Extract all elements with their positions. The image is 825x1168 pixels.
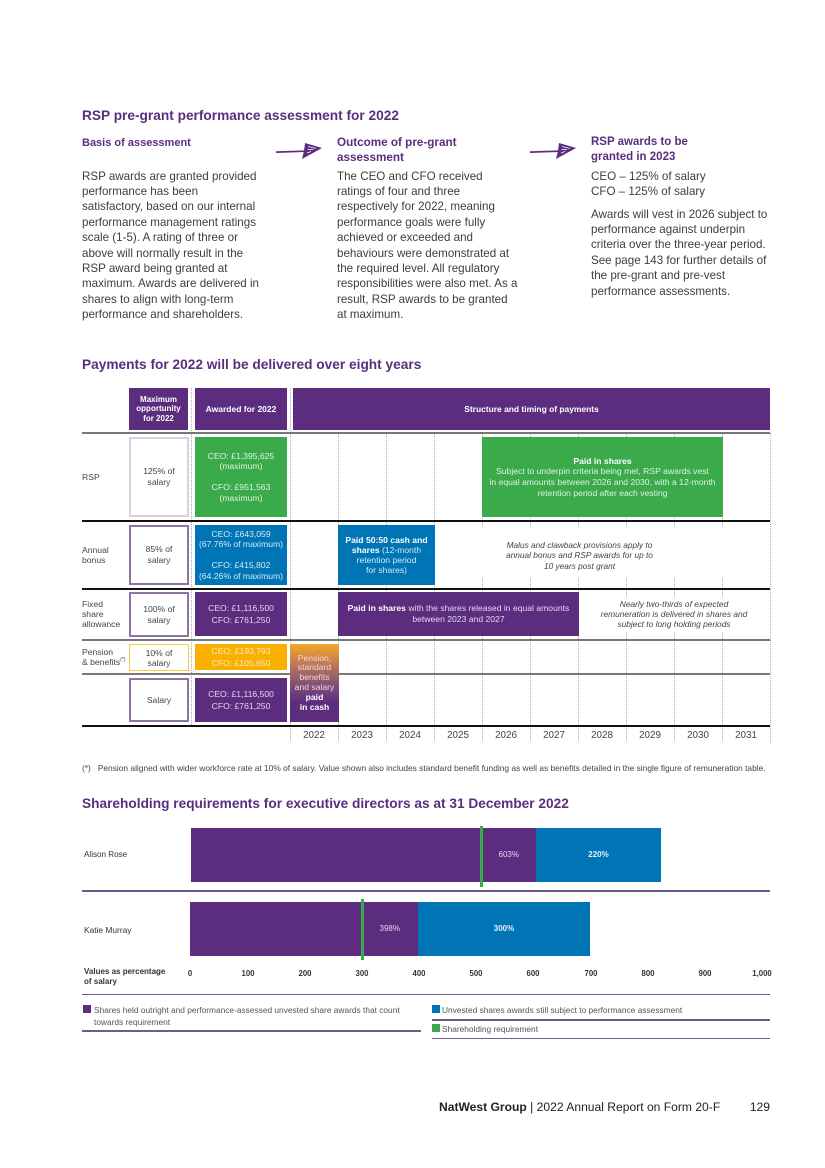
timing: fixed share allowance [338,592,579,636]
header: structure and timing: Structure and timing of payments [464,404,599,414]
heading: payments: Payments for 2022 will be delivered over eight years [82,357,421,372]
footer: 129 [750,1100,770,1114]
award: annual bonus [195,525,287,585]
subheading: awards: granted in 2023 [591,151,675,163]
text: vesting details: the pre-grant and pre-vest [591,269,725,282]
footnote: (*) Pension aligned with wider workforce rate at 10% of salary. Value shown also includes standard benefit funding as well as benefits detailed in the single figure of remuneration table. [82,763,766,773]
text: basis body: above will normally result in the [82,247,243,260]
bar: Alison Rose unvested [536,828,661,882]
timing: RSP paid in shares [482,437,723,517]
bar: Alison Rose unvested: 220% [588,850,609,859]
header: maximum opportunity: for 2022 [143,414,174,423]
label: annual bonus [82,545,109,565]
axis: values as percentage of salary: 1,000 [752,969,772,978]
axis: values as percentage of salary: 800 [641,969,654,978]
axis: years: 2025 [447,730,469,741]
award: RSP [195,437,287,517]
axis: years: 2024 [399,730,421,741]
header: maximum opportunity: opportunity [136,404,181,413]
text: vesting details: See page 143 for further details of [591,254,766,267]
label: annual bonus: bonus [82,555,105,565]
timing: pension and salary paid in cash: and salary [295,682,334,692]
opportunity: pension: 10% of [146,648,172,658]
text: outcome body: the required level. All regulatory [337,262,499,275]
axis: years: 2028 [591,730,613,741]
note: malus and clawback: annual bonus and RSP awards for up to [506,550,653,560]
text: basis body: performance has been [82,185,198,198]
axis: values as percentage of salary: 0 [188,969,192,978]
text: outcome body: at maximum. [337,308,403,321]
legend: Unvested shares awards still subject to performance assessment [442,1004,682,1014]
award: pension [195,644,287,670]
text: award levels: CFO – 125% of salary [591,185,705,198]
timing: pension and salary paid in cash: standard [298,662,331,672]
timing: annual bonus paid 50:50: Paid 50:50 cash and [345,535,428,545]
opportunity: RSP: 125% of [143,466,175,476]
axis: years: 2022 [303,730,325,741]
award: salary [195,678,287,722]
note: malus and clawback: Malus and clawback provisions apply to [507,540,652,550]
text: basis body: performance and shareholders. [82,308,243,321]
text: basis body: scale (1-5). A rating of three or [82,231,238,244]
timing: pension and salary paid in cash: in cash [300,702,329,712]
bar: Alison Rose shares: 603% [499,850,519,859]
axis: values as percentage of salary: 200 [298,969,312,978]
opportunity: fixed share allowance: 100% of [143,604,175,614]
icon: arrow 2 [530,143,576,159]
award: salary: CEO: £1,116,500 [208,689,274,699]
axis: values as percentage of salary: 900 [698,969,712,978]
text: outcome body: behaviours were demonstrated at [337,247,509,260]
axis: values as percentage of salary: Values as percentage [84,967,165,976]
heading: shareholding: Shareholding requirements for executive directors as at 31 December 2022 [82,796,569,811]
footer: NatWest Group | 2022 Annual Report on Form 20-F [439,1100,720,1114]
award: RSP: (maximum) [220,461,262,471]
subheading: outcome: assessment [337,151,404,164]
bar: Alison Rose shares [191,828,536,882]
axis: values as percentage of salary: 500 [469,969,482,978]
timing: pension and salary paid in cash [290,644,339,722]
axis: years: 2026 [495,730,517,741]
opportunity: pension: salary [148,658,170,668]
note: two-thirds: subject to long holding periods [617,619,731,629]
panel: RSP awards to be granted [591,136,767,298]
text: outcome body: ratings of four and three [337,185,460,198]
bar: Katie Murray shares: 398% [380,924,400,933]
award: annual bonus: (67.76% of maximum) [199,539,283,549]
subheading: awards: RSP awards to be [591,136,688,148]
note: two-thirds: remuneration is delivered in shares and [601,609,747,619]
timing: RSP paid in shares: retention period after each vesting [538,488,667,498]
text: outcome body: achieved or exceeded and [337,231,473,244]
legend item: requirement [432,1024,440,1032]
award: pension: CFO: £105,650 [212,658,270,668]
panel: outcome of assessment [337,136,518,321]
marker: Katie Murray requirement [360,899,364,960]
heading: RSP pre-grant assessment: RSP pre-grant performance assessment for 2022 [82,108,399,123]
label: pension and benefits: Pension [82,647,113,657]
text: basis body: RSP awards are granted provided [82,170,256,182]
subheading: outcome: Outcome of pre-grant [337,136,456,149]
timing: pension and salary paid in cash: benefits [299,672,330,682]
opportunity: annual bonus: 85% of [146,544,172,554]
opportunity: pension [129,644,189,671]
legend: Shares held outright and performance-assessed unvested share awards that count [94,1004,400,1014]
timing: fixed share allowance: between 2023 and 2027 [412,614,505,624]
axis: values as percentage of salary: 300 [355,969,368,978]
text: vesting details: performance assessments. [591,285,730,298]
opportunity: fixed share allowance [129,592,189,637]
header: maximum opportunity: Maximum [140,395,177,404]
marker: Alison Rose requirement [480,826,483,887]
text: award levels [591,170,706,198]
award: salary: CFO: £761,250 [212,701,270,711]
text: basis body: shares to align with long-term [82,293,233,306]
opportunity: RSP: salary [148,477,170,487]
text: basis body: RSP award being granted at [82,262,227,275]
axis: values as percentage of salary [84,967,772,986]
bar: Katie Murray unvested: 300% [494,924,514,933]
axis: years: 2029 [639,730,661,741]
legend item: shares held [83,1005,91,1013]
subheading: basis: Basis of assessment [82,137,191,149]
opportunity: salary [129,678,189,722]
note: malus and clawback [481,528,724,578]
opportunity: annual bonus [129,525,189,585]
header: awarded: Awarded for 2022 [206,404,276,414]
text: award levels: CEO – 125% of salary [591,170,706,182]
opportunity: annual bonus: salary [148,555,170,565]
award: RSP: CFO: £951,563 [212,482,270,492]
award: annual bonus: CFO: £415,802 [212,560,270,570]
icon: arrow 1 [276,143,322,159]
note: two-thirds: Nearly two-thirds of expected [620,599,728,609]
legend: towards requirement [94,1016,170,1026]
timing: annual bonus paid 50:50: shares (12-month [352,545,421,555]
note: malus and clawback: 10 years post grant [544,561,615,571]
axis: years: 2030 [687,730,709,741]
label: fixed share allowance [82,599,120,629]
text: outcome body: The CEO and CFO received [337,170,483,182]
label: fixed share allowance: Fixed [82,599,103,609]
note: two-thirds [580,597,768,631]
text: outcome body: respectively for 2022, meaning [337,200,495,213]
timing: annual bonus paid 50:50: retention period [357,555,416,565]
label: annual bonus: Annual [82,545,109,555]
opportunity: RSP [129,437,189,517]
award: pension: CEO: £193,793 [211,646,271,656]
bar: Katie Murray shares [190,902,418,956]
label: fixed share allowance: share [82,609,104,619]
timing: pension and salary paid in cash: Pension, [298,653,331,663]
timing: RSP paid in shares: Paid in shares [573,456,632,466]
text: outcome body: result, RSP awards to be granted [337,293,508,306]
text: basis body: maximum. Awards are delivered in [82,277,259,290]
axis: values as percentage of salary: 400 [412,969,426,978]
bar: Katie Murray unvested [418,902,590,956]
axis: values as percentage of salary: 100 [241,969,254,978]
axis: values as percentage of salary: 700 [584,969,598,978]
panel: basis of assessment [82,137,259,321]
award: fixed share allowance: CEO: £1,116,500 [208,603,274,613]
legend [82,1004,770,1039]
award: fixed share allowance [195,592,287,636]
award: annual bonus: CEO: £643,059 [211,529,271,539]
text: basis body: satisfactory, based on our internal [82,200,255,213]
label: pension and benefits [82,647,126,667]
axis: years: 2027 [543,730,565,741]
axis: values as percentage of salary: of salary [84,977,117,986]
timing: RSP paid in shares: Subject to underpin criteria being met, RSP awards vest [496,466,709,476]
text: vesting details [591,208,767,298]
label: RSP: RSP [82,472,100,482]
legend item: unvested shares [432,1005,440,1013]
text: vesting details: Awards will vest in 2026 subject to [591,208,767,220]
timing: pension and salary paid in cash: paid [306,692,323,702]
opportunity: fixed share allowance: salary [148,614,170,624]
award: fixed share allowance: CFO: £761,250 [212,615,270,625]
axis: years: 2023 [351,730,373,741]
award: RSP: (maximum) [220,493,262,503]
header: maximum opportunity [129,388,188,430]
label: Katie Murray: Katie Murray [84,925,131,935]
text: outcome body [337,170,518,321]
label: Alison Rose: Alison Rose [84,850,127,859]
text: outcome body: responsibilities were also met. As a [337,277,517,290]
label: pension and benefits: & benefits(*) [82,657,126,667]
timing: annual bonus paid 50:50 [338,525,435,585]
text: vesting details: criteria over the three-year period. [591,238,766,251]
subheading: awards [591,136,688,163]
chart: shareholding bars [82,826,770,960]
opportunity: salary: Salary [147,695,171,705]
award: annual bonus: (64.26% of maximum) [199,571,283,581]
label: fixed share allowance: allowance [82,619,120,629]
text: vesting details: performance against underpin [591,223,745,236]
text: outcome body: performance goals were fully [337,216,485,229]
legend: Shareholding requirement [442,1024,538,1034]
text: basis body: performance management ratings [82,216,256,229]
axis: values as percentage of salary: 600 [526,969,540,978]
timing: RSP paid in shares: in equal amounts between 2026 and 2030, with a 12-month [490,477,716,487]
award: RSP: CEO: £1,395,625 [208,451,274,461]
subheading: outcome [337,136,456,164]
header: awarded [195,388,287,430]
text: basis body [82,170,259,321]
timing: fixed share allowance: Paid in shares with the shares released in equal amounts [348,603,569,613]
chart: payment timeline [82,388,771,743]
timing: annual bonus paid 50:50: for shares) [366,565,407,575]
axis: years [303,730,757,741]
axis: years: 2031 [735,730,757,741]
header: structure and timing [293,388,770,430]
